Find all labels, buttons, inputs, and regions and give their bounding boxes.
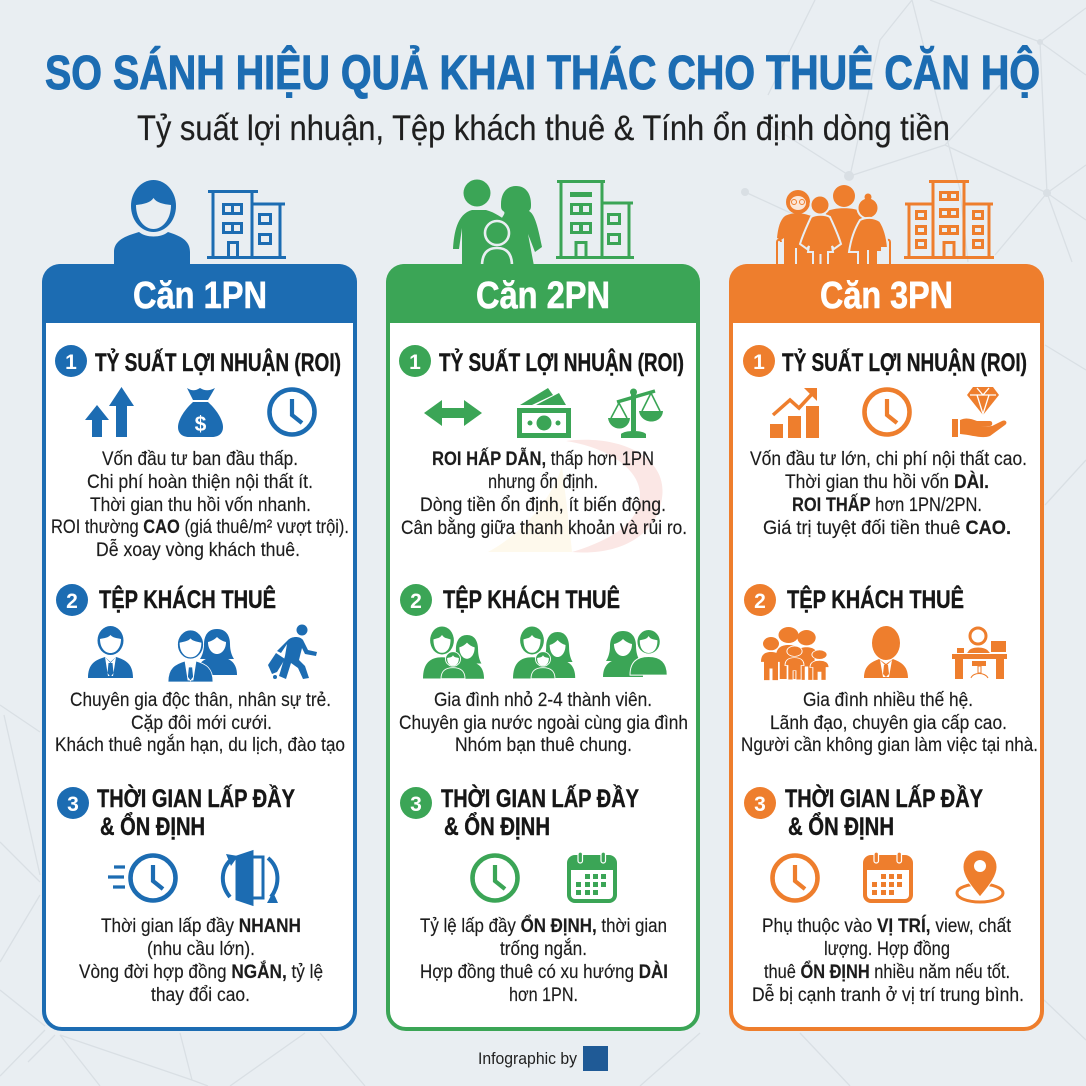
panel: Căn 1PN	[42, 264, 357, 1029]
section 3 text: thuê ỔN ĐỊNH nhiều năm nếu tốt.	[764, 961, 1010, 983]
icon: family with child	[513, 626, 575, 679]
section 1 heading: 1	[65, 351, 77, 374]
icon: hand with diamond	[952, 387, 1006, 437]
section 2 heading: 2	[410, 590, 422, 613]
card heading 3PN: Căn 3PN	[820, 275, 953, 317]
section 3 text: lượng. Hợp đồng	[824, 939, 950, 960]
section 1 text	[51, 449, 349, 561]
section 3 heading: & ỔN ĐỊNH	[788, 811, 894, 841]
section 3 heading: THỜI GIAN LẤP ĐẦY	[441, 783, 639, 813]
section 2 text: Khách thuê ngắn hạn, du lịch, đào tạo	[55, 734, 345, 756]
section 3 text: Vòng đời hợp đồng NGẮN, tỷ lệ	[79, 961, 323, 983]
footer credit	[478, 1046, 608, 1071]
card header 3PN	[729, 264, 1044, 323]
watermark	[488, 440, 663, 552]
section 2 text: Gia đình nhiều thế hệ.	[803, 690, 973, 711]
icon: large family	[761, 627, 829, 680]
section 2 heading: TỆP KHÁCH THUÊ	[443, 584, 620, 614]
section 1 text: Thời gian thu hồi vốn DÀI.	[785, 471, 989, 493]
hero icon: single person	[114, 180, 190, 266]
subtitle: Tỷ suất lợi nhuận, Tệp khách thuê & Tính ổn định dòng tiền	[137, 109, 950, 148]
section 2 text: Chuyên gia độc thân, nhân sự trẻ.	[70, 690, 331, 711]
section 3 text: trống ngắn.	[500, 938, 587, 960]
section 3 text	[420, 915, 668, 1006]
section 3 text: (nhu cầu lớn).	[147, 939, 255, 960]
section 1 heading	[399, 345, 684, 377]
section 3 text: thay đổi cao.	[151, 985, 250, 1006]
section 1 heading: 1	[409, 351, 421, 374]
section 1 text: ROI HẤP DẪN, thấp hơn 1PN	[432, 448, 654, 470]
icon: calendar	[569, 852, 615, 901]
hero icon: building 2PN	[556, 182, 634, 258]
icon: calendar	[865, 852, 911, 901]
icon: executive	[864, 626, 908, 678]
section 1 heading: 1	[753, 351, 765, 374]
section 2 text: Nhóm bạn thuê chung.	[455, 735, 632, 756]
hero icon: building 3PN	[904, 182, 994, 258]
hero icon: family of three	[453, 180, 542, 266]
section 3 text	[79, 916, 323, 1006]
section 2 text: Cặp đôi mới cưới.	[131, 713, 272, 734]
section 3 text: Phụ thuộc vào VỊ TRÍ, view, chất	[762, 915, 1012, 937]
footer credit: Infographic by	[478, 1049, 577, 1068]
section 1 text: Thời gian thu hồi vốn nhanh.	[90, 495, 311, 516]
card heading 2PN: Căn 2PN	[476, 275, 610, 317]
section 1 text: Giá trị tuyệt đối tiền thuê CAO.	[763, 518, 1011, 539]
icon: fast clock	[108, 856, 176, 900]
icon: money bag: $	[195, 413, 207, 436]
section 2 heading	[56, 584, 276, 616]
card frame 2PN	[388, 266, 698, 1029]
icon: clock	[772, 856, 818, 900]
logo square	[583, 1046, 608, 1071]
section 2 text: Người cần không gian làm việc tại nhà.	[741, 735, 1038, 756]
section 1 text: Vốn đầu tư lớn, chi phí nội thất cao.	[750, 449, 1027, 470]
card header 2PN	[386, 264, 700, 323]
section 2 heading: 2	[66, 590, 78, 613]
icon: traveler with suitcase	[268, 624, 317, 679]
icon: double arrow	[424, 400, 482, 426]
panel: Căn 3PN	[729, 264, 1044, 1029]
section 3 heading	[744, 783, 983, 841]
icon: small family	[423, 626, 484, 679]
section 1 text: ROI thường CAO (giá thuê/m² vượt trội).	[51, 517, 349, 538]
section 1 text: Dễ xoay vòng khách thuê.	[96, 539, 300, 561]
card header 1PN	[42, 264, 357, 323]
section 2 heading	[400, 584, 620, 616]
icon: professional in suit	[88, 626, 133, 678]
section 2 text: Lãnh đạo, chuyên gia cấp cao.	[770, 713, 1007, 734]
icon: couple	[168, 629, 237, 682]
section 3 heading: 3	[410, 793, 422, 816]
section 3 heading: 3	[754, 793, 766, 816]
section 3 heading	[57, 783, 295, 841]
section 3 text: Tỷ lệ lấp đầy ỔN ĐỊNH, thời gian	[420, 915, 667, 937]
section 1 text: Cân bằng giữa thanh khoản và rủi ro.	[401, 517, 687, 539]
hero icon: multi-generation family	[777, 185, 890, 266]
card frame 3PN	[731, 266, 1042, 1029]
hero icon: building 1PN	[207, 192, 286, 258]
panel: Căn 2PN	[386, 264, 700, 1029]
icon: clock	[472, 856, 518, 900]
section 1 heading: TỶ SUẤT LỢI NHUẬN (ROI)	[95, 347, 341, 377]
section 1 heading	[55, 345, 341, 377]
section 2 heading	[744, 584, 964, 616]
icon: revolving door	[223, 852, 278, 904]
section 3 heading: 3	[67, 793, 79, 816]
section 3 heading: THỜI GIAN LẤP ĐẦY	[97, 783, 295, 813]
section 1 text: Dòng tiền ổn định, ít biến động.	[420, 495, 666, 516]
section 2 text	[741, 690, 1038, 756]
section 2 heading: TỆP KHÁCH THUÊ	[787, 584, 964, 614]
icon: location pin	[957, 850, 1003, 902]
section 3 heading: & ỔN ĐỊNH	[444, 811, 550, 841]
section 3 heading	[400, 783, 639, 841]
card frame 1PN	[44, 266, 355, 1029]
section 3 heading: THỜI GIAN LẤP ĐẦY	[785, 783, 983, 813]
icon: balance scale	[608, 388, 663, 438]
section 1 text: nhưng ổn định.	[488, 472, 598, 493]
section 1 text: ROI THẤP hơn 1PN/2PN.	[792, 494, 982, 516]
icon: banknotes	[517, 388, 571, 438]
section 3 text: Dễ bị cạnh tranh ở vị trí trung bình.	[752, 984, 1024, 1006]
section 3 text: Thời gian lấp đầy NHANH	[101, 916, 301, 937]
section 3 text: Hợp đồng thuê có xu hướng DÀI	[420, 961, 668, 983]
icon: money bag	[178, 388, 223, 437]
section 3 heading: & ỔN ĐỊNH	[100, 811, 205, 841]
section 1 heading: TỶ SUẤT LỢI NHUẬN (ROI)	[439, 347, 684, 377]
icon: clock	[270, 390, 314, 434]
section 1 text	[750, 449, 1027, 539]
section 1 text	[401, 448, 687, 539]
section 2 text	[399, 690, 688, 756]
section 2 heading: TỆP KHÁCH THUÊ	[99, 584, 276, 614]
section 2 heading: 2	[754, 590, 766, 613]
icon: friends pair	[603, 630, 667, 677]
section 3 text: hơn 1PN.	[509, 985, 578, 1006]
section 2 text	[55, 690, 345, 756]
icon: clock	[864, 390, 910, 434]
icon: rising arrows	[85, 387, 134, 437]
card heading 1PN: Căn 1PN	[133, 275, 267, 317]
section 2 text: Gia đình nhỏ 2-4 thành viên.	[434, 690, 652, 711]
section 1 heading	[743, 345, 1027, 377]
section 1 text: Vốn đầu tư ban đầu thấp.	[102, 449, 298, 470]
icon: growth chart	[770, 388, 819, 438]
section 3 text	[752, 915, 1024, 1006]
section 1 text: Chi phí hoàn thiện nội thất ít.	[87, 472, 313, 493]
section 2 text: Chuyên gia nước ngoài cùng gia đình	[399, 713, 688, 734]
icon: home office	[952, 628, 1007, 679]
